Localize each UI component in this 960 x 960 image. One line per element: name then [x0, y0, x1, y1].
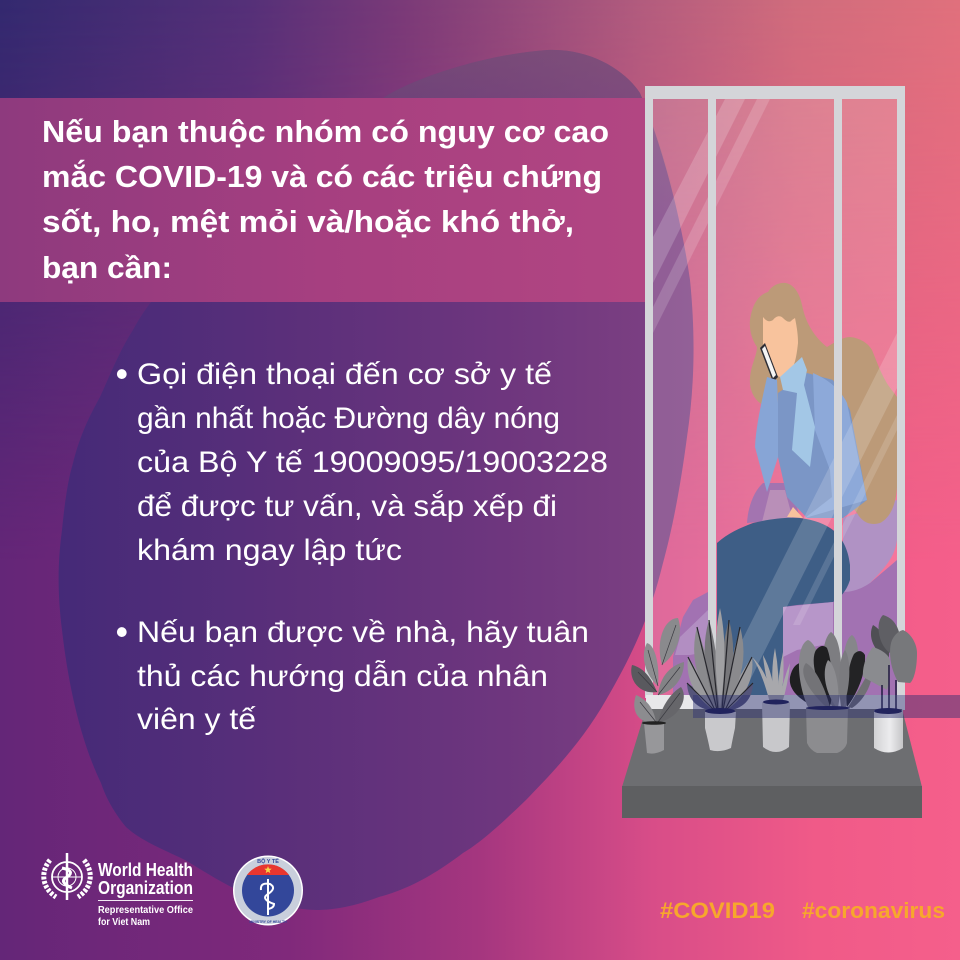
bullet list: gần nhất hoặc Đường dây nóng — [137, 402, 560, 435]
plant: rubber leaf — [631, 618, 684, 754]
bullet list: viên y tế — [137, 703, 256, 736]
window sill — [622, 709, 922, 818]
left sleeve — [755, 377, 778, 492]
illustration: woman on the phone behind a window — [645, 86, 905, 710]
bullet list: khám ngay lập tức — [137, 534, 402, 567]
plant: monstera — [863, 615, 917, 710]
phone — [760, 343, 778, 382]
face — [763, 316, 798, 377]
heading text: Nếu bạn thuộc nhóm có nguy cơ cao — [42, 114, 609, 149]
WHO wordmark: Representative Office — [98, 904, 193, 916]
hand — [787, 507, 803, 518]
heading text: bạn cần: — [42, 250, 172, 285]
plant: fan palm — [687, 608, 753, 711]
bullet list: • — [116, 353, 128, 394]
hashtags: #COVID19 — [660, 898, 775, 923]
WHO wordmark: for Viet Nam — [98, 916, 150, 928]
hair — [750, 283, 897, 524]
skirt and legs — [717, 518, 850, 696]
scarf — [780, 357, 815, 467]
bullet list: để được tư vấn, và sắp xếp đi — [137, 490, 557, 523]
sweater torso — [778, 373, 867, 518]
bullet list: Nếu bạn được về nhà, hãy tuân — [137, 616, 589, 649]
heading text: sốt, ho, mệt mỏi và/hoặc khó thở, — [42, 204, 574, 239]
WHO wordmark: World Health — [98, 860, 193, 880]
Ministry of Health logo — [233, 856, 303, 926]
decorative blob panel — [59, 50, 694, 910]
heading text — [42, 114, 609, 285]
WHO emblem — [44, 853, 90, 900]
heading band — [0, 98, 646, 302]
plant: broad leaf — [790, 632, 872, 708]
hashtags: #coronavirus — [802, 898, 945, 923]
WHO wordmark — [98, 860, 193, 928]
bullet list: thủ các hướng dẫn của nhân — [137, 660, 548, 693]
hashtags — [660, 898, 945, 923]
Ministry of Health logo: MINISTRY OF HEALTH — [249, 920, 287, 924]
bullet list: Gọi điện thoại đến cơ sở y tế — [137, 358, 552, 391]
WHO wordmark: Organization — [98, 878, 193, 898]
WHO logo — [44, 853, 193, 928]
translucent sill shadow strip — [693, 695, 960, 718]
bullet list: của Bộ Y tế 19009095/19003228 — [137, 446, 608, 479]
chair — [673, 483, 897, 696]
plant: spiky grass — [752, 648, 790, 703]
window frame — [645, 86, 905, 698]
Ministry of Health logo: BỘ Y TẾ — [257, 857, 279, 865]
cushion — [783, 602, 833, 657]
bullet list — [116, 353, 608, 736]
glass reflections — [717, 333, 897, 690]
plants — [631, 608, 917, 754]
glass pane — [646, 86, 905, 706]
heading text: mắc COVID-19 và có các triệu chứng — [42, 158, 602, 194]
right sleeve — [805, 373, 867, 518]
bullet list: • — [116, 611, 128, 652]
